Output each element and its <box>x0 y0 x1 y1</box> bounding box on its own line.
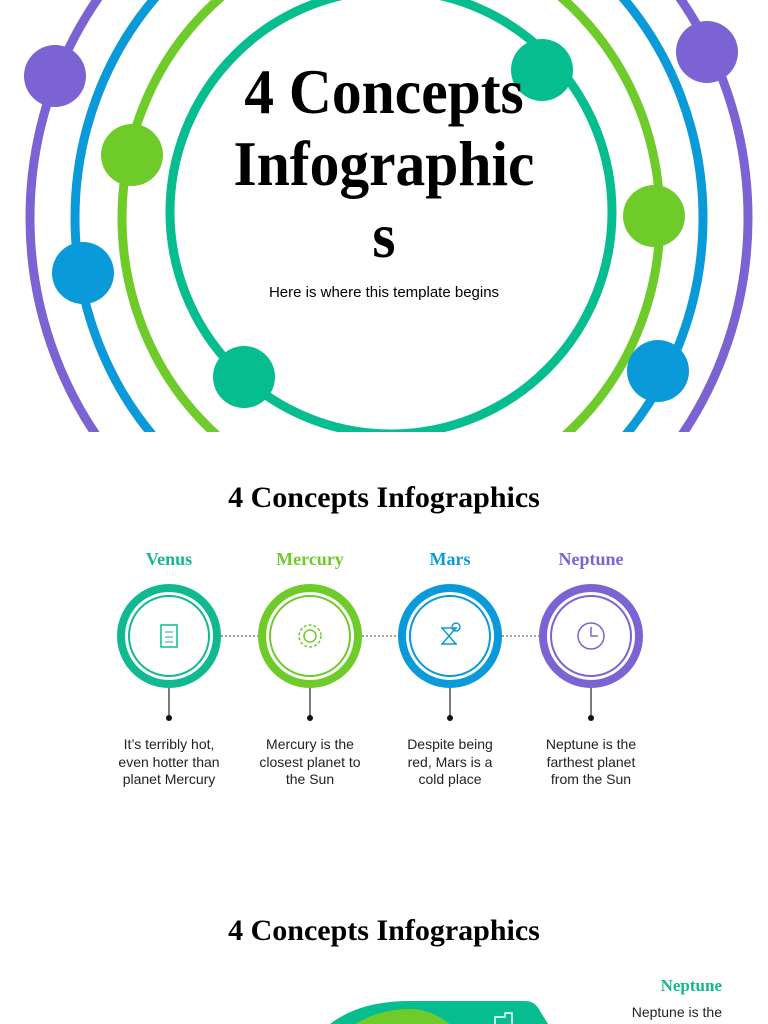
section title 3: 4 Concepts Infographics <box>228 914 540 947</box>
text: Neptune is the farthest planet from the Sun <box>546 736 636 787</box>
bottom shape <box>330 1001 548 1024</box>
text: Neptune <box>558 549 624 569</box>
Neptune label: Neptune <box>661 976 722 995</box>
descriptions: It’s terribly hot, even hotter than planet Mercury <box>118 736 220 787</box>
hero rings <box>24 0 752 432</box>
main title: Infographic <box>234 128 534 199</box>
Neptune text: Neptune is the <box>632 1004 722 1020</box>
labels: Venus <box>146 549 192 569</box>
text: Mercury is the closest planet to the Sun <box>259 736 361 787</box>
main title: 4 Concepts <box>244 56 524 127</box>
text: Mars <box>430 549 470 569</box>
timeline circles <box>117 584 643 721</box>
section title 2: 4 Concepts Infographics <box>228 481 540 514</box>
main title <box>234 56 534 271</box>
text: Mercury <box>276 549 344 569</box>
main title: s <box>372 200 396 271</box>
text: Despite being red, Mars is a cold place <box>407 736 493 787</box>
subtitle: Here is where this template begins <box>269 284 499 301</box>
